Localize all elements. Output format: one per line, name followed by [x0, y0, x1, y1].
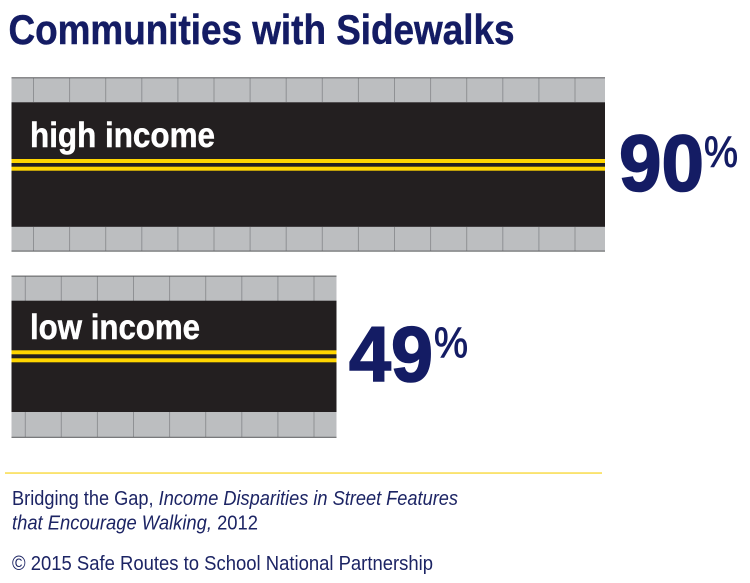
label: high income: high income [30, 115, 215, 155]
source citation [12, 488, 458, 534]
value: 49 percent: % [434, 320, 468, 368]
copyright: © 2015 Safe Routes to School National Partnership [12, 553, 433, 575]
bar: high income road [12, 77, 605, 252]
source citation: Bridging the Gap, Income Disparities in Street Features [12, 488, 458, 510]
value: 90 percent: % [704, 128, 738, 176]
title: Communities with Sidewalks [8, 6, 514, 53]
value: 90 percent: 90 [619, 118, 704, 208]
value: 49 percent: 49 [349, 310, 433, 398]
source citation: that Encourage Walking, 2012 [12, 512, 258, 534]
label: low income: low income [30, 308, 200, 347]
bar: low income road [12, 276, 336, 438]
